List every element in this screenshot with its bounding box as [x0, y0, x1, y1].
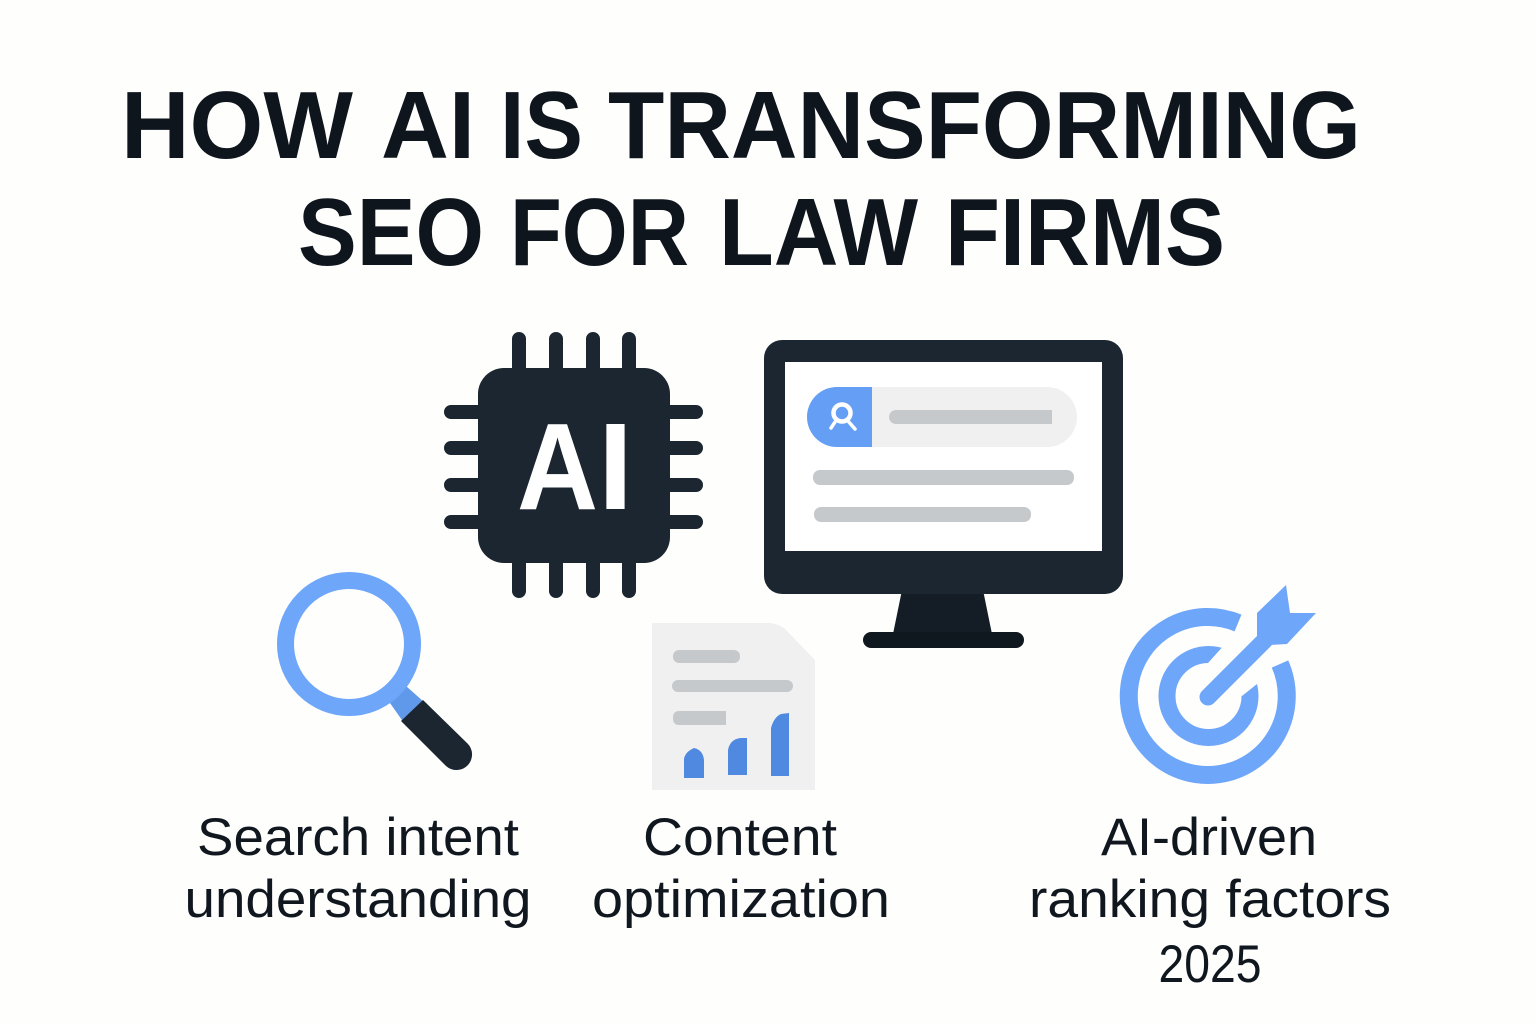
label: search intent understanding: understanding: [184, 870, 532, 929]
title: IS: [500, 72, 583, 179]
title: TRANSFORMING: [608, 72, 1361, 179]
title: FIRMS: [945, 179, 1225, 286]
label: AI-driven ranking factors 2025: AI-driven: [1101, 808, 1317, 867]
label: AI-driven ranking factors 2025: [1029, 808, 1391, 994]
title: SEO: [298, 179, 484, 286]
icon: AI chip: [451, 339, 696, 591]
title: [121, 72, 1361, 286]
label: content optimization: [592, 808, 890, 929]
icon: AI chip: A: [517, 399, 598, 536]
label: content optimization: Content: [643, 808, 837, 867]
label: AI-driven ranking factors 2025: 2025: [1158, 935, 1262, 994]
icon: magnifying glass: [286, 580, 472, 770]
label: AI-driven ranking factors 2025: ranking factors: [1029, 870, 1391, 929]
icon: target with arrow: [1129, 585, 1316, 775]
title: LAW: [719, 179, 918, 286]
icon: computer monitor with search results: [764, 340, 1123, 648]
title: HOW: [121, 72, 353, 179]
label: content optimization: optimization: [592, 870, 890, 929]
title: AI: [381, 72, 475, 179]
label: search intent understanding: Search intent: [197, 808, 519, 867]
icon: AI chip: I: [598, 399, 633, 536]
label: search intent understanding: [184, 808, 532, 929]
title: FOR: [510, 179, 689, 286]
icon: content document with bar chart: [652, 623, 815, 790]
